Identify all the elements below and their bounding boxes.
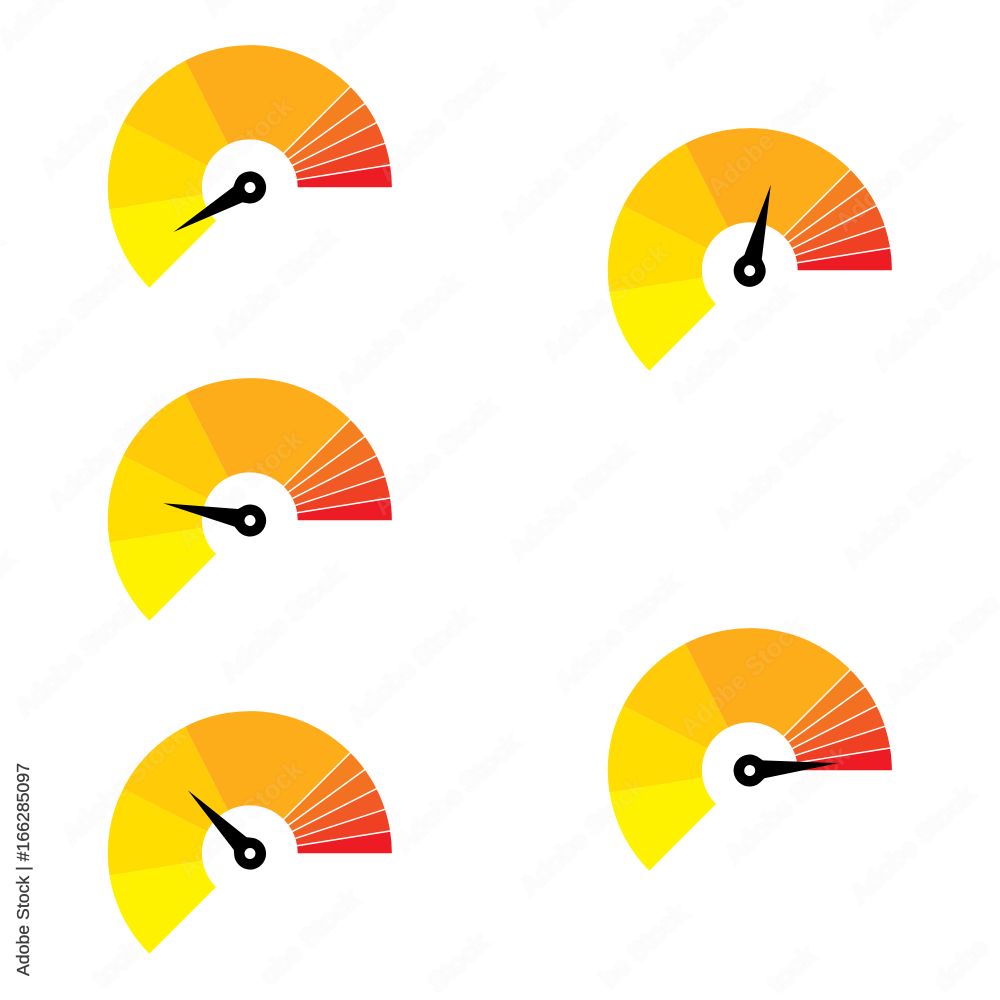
- stock watermark pattern: Adobe Stock: [9, 592, 146, 722]
- gauge dial: bottom right: [608, 628, 892, 871]
- stock watermark pattern: Adobe Stock: [537, 237, 674, 367]
- needle: top left gauge: [165, 166, 272, 246]
- stock watermark pattern: Adobe Stock: [214, 557, 351, 687]
- stock watermark pattern: Adobe Stock: [514, 771, 651, 901]
- stock watermark pattern: Adobe Stock: [709, 403, 846, 533]
- needle: top right gauge: [730, 181, 786, 290]
- needle: middle left gauge: [160, 488, 269, 539]
- stock watermark pattern: Adobe Stock: [549, 567, 686, 697]
- side credit text: Adobe Stock | #166285097: [13, 763, 33, 976]
- stock watermark pattern: Adobe Stock: [172, 424, 309, 554]
- gauge dial: top left: [108, 45, 392, 288]
- gauge dial: bottom left: [108, 711, 392, 954]
- stock watermark pattern: Stock: [422, 927, 494, 997]
- gauge dial: middle left: [108, 378, 392, 621]
- needle: bottom left gauge: [177, 779, 273, 876]
- stock watermark pattern: Adobe Stock: [0, 256, 136, 386]
- stock watermark pattern: Adobe Stock: [331, 267, 468, 397]
- stock watermark pattern: Adobe Stock: [844, 779, 981, 909]
- stock watermark pattern: be Stock: [594, 897, 694, 993]
- stock watermark pattern: Adobe Stock: [56, 719, 193, 849]
- stock watermark pattern: Adobe Stock: [367, 391, 504, 521]
- stock watermark pattern: tock: [762, 940, 822, 998]
- stock watermark pattern: Adobe Stock: [42, 385, 179, 515]
- needle: bottom right gauge: [732, 747, 839, 788]
- stock watermark pattern: Adobe Stock: [664, 277, 801, 407]
- stock watermark pattern: Adobe Stock: [172, 754, 309, 884]
- stock watermark pattern: Adobe Stock: [342, 601, 479, 731]
- stock watermark pattern: Adobe Stock: [719, 739, 856, 869]
- stock watermark pattern: Adobe Stock: [372, 57, 509, 187]
- stock watermark pattern: Adobe Stock: [503, 435, 640, 565]
- stock watermark pattern: tock: [87, 935, 147, 993]
- stock watermark pattern: Adobe Stock: [494, 106, 631, 236]
- stock watermark pattern: Adobe Stock: [34, 52, 171, 182]
- stock watermark pattern: Adobe Stock: [674, 612, 811, 742]
- stock watermark pattern: Adobe Stock: [701, 72, 838, 202]
- stock watermark pattern: Adobe Stock: [206, 222, 343, 352]
- stock watermark pattern: Adobe Stock: [837, 443, 974, 573]
- stock watermark pattern: Adobe Stock: [162, 91, 299, 221]
- stock watermark pattern: obe Stock: [254, 883, 365, 990]
- stock watermark pattern: Adobe Stock: [829, 107, 966, 237]
- stock watermark pattern: Adobe Stock: [867, 246, 1000, 376]
- stock watermark pattern: dobe: [928, 932, 994, 996]
- gauge dial: top right: [608, 128, 892, 371]
- stock watermark pattern: Adobe Stock: [389, 727, 526, 857]
